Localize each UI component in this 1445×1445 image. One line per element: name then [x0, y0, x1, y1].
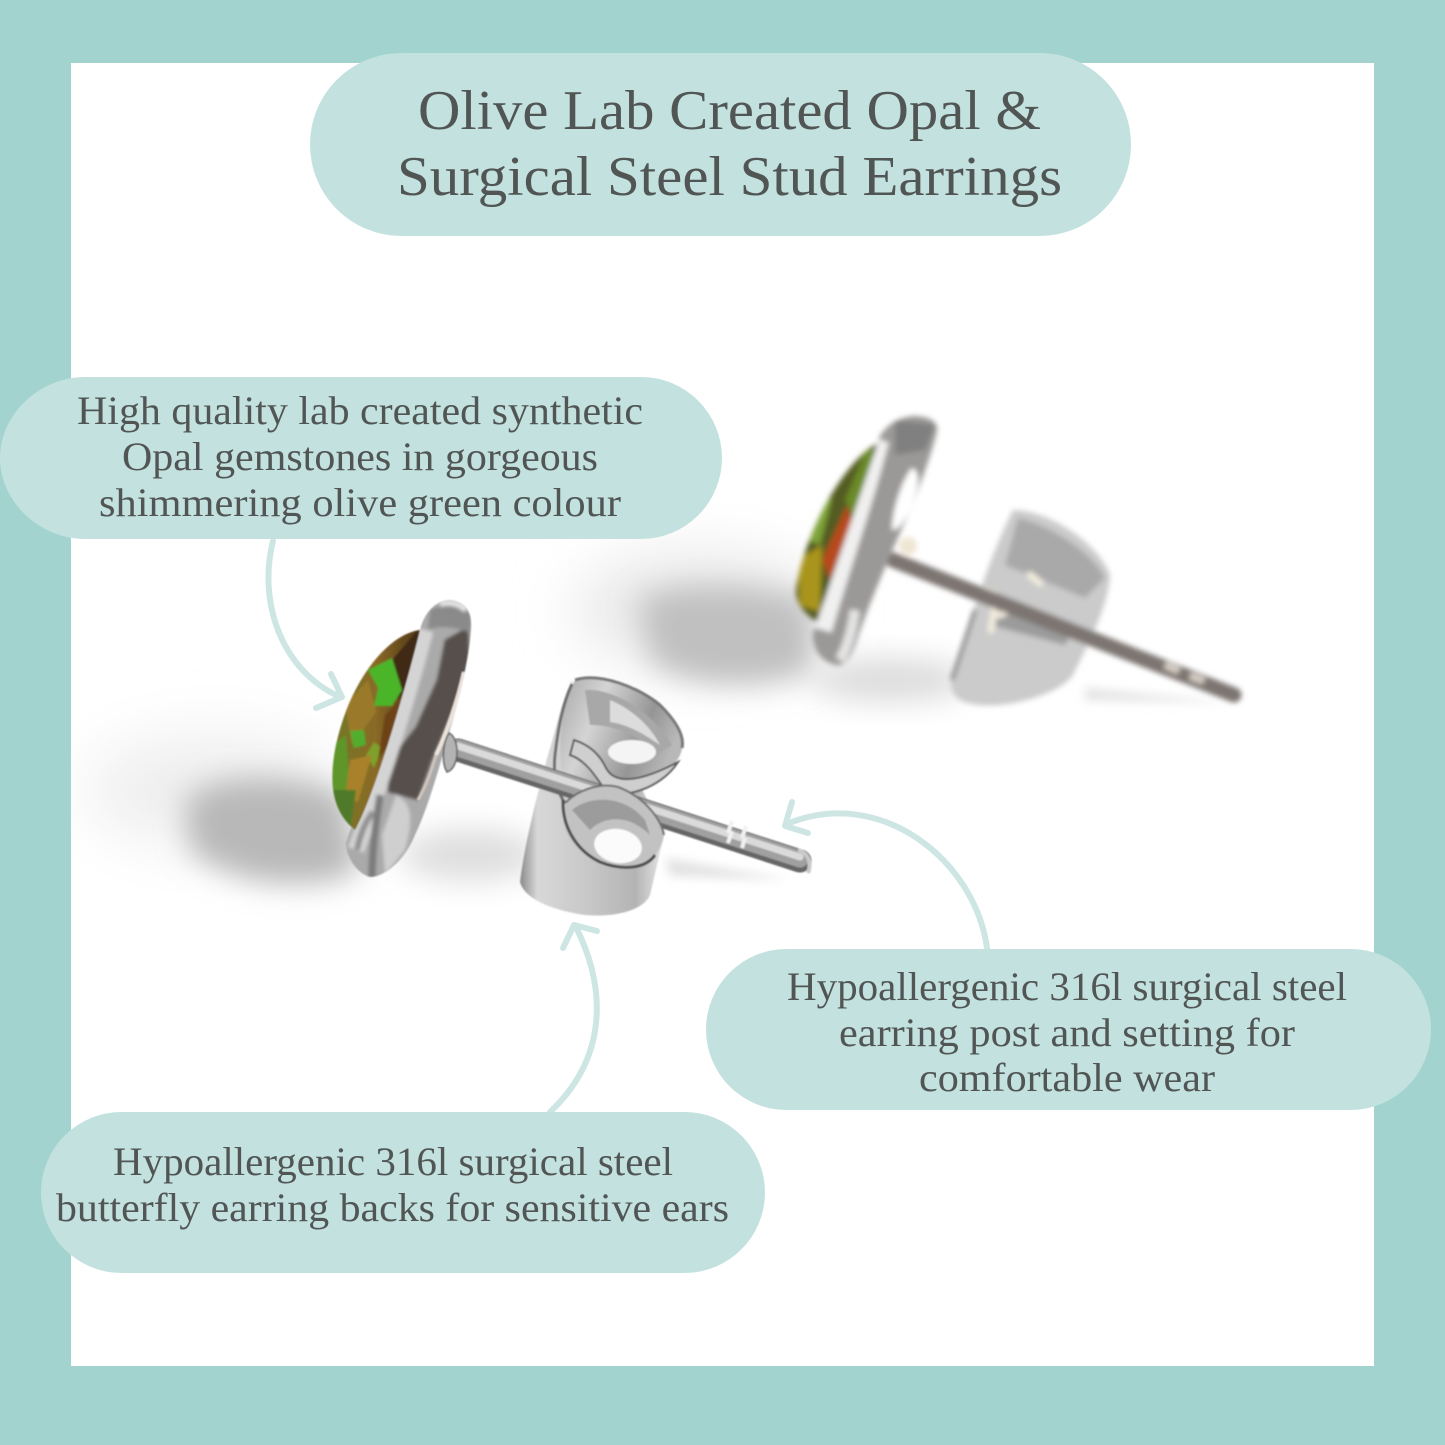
callout: butterfly backs: Hypoallergenic 316l surgical steel: [113, 1139, 673, 1184]
front earring back: upper wing: [554, 678, 683, 805]
front earring bezel: [346, 600, 472, 878]
front earring back: lower ring: [563, 785, 664, 867]
shadow: front earring: [85, 735, 790, 884]
rear earring bezel: [805, 410, 945, 670]
rear stone: [790, 440, 885, 630]
arrow: opal callout to stone: [268, 541, 342, 708]
shadow: rear earring: [575, 555, 1230, 703]
arrow: post callout to post: [785, 802, 987, 948]
front earring: [325, 595, 810, 916]
callout: opal gemstones: shimmering olive green colour: [99, 480, 621, 525]
callout: surgical steel post: comfortable wear: [919, 1055, 1215, 1100]
callout: opal gemstones: Opal gemstones in gorgeous: [122, 434, 598, 479]
front earring post collar: [443, 733, 457, 772]
title: Surgical Steel Stud Earrings: [397, 146, 1062, 208]
earring photo: [85, 410, 1234, 916]
callout: surgical steel post: [706, 949, 1431, 1110]
callout: opal gemstones: High quality lab created synthetic: [77, 388, 643, 433]
arrow: back callout to butterfly back: [550, 925, 597, 1112]
front earring post: [458, 746, 810, 873]
rear earring: [790, 410, 1234, 705]
rear earring back: [951, 510, 1110, 705]
rear earring post: [893, 560, 1234, 695]
callout: opal gemstones: [0, 377, 722, 539]
callout: surgical steel post: Hypoallergenic 316l surgical steel: [787, 964, 1347, 1009]
callout: butterfly backs: [41, 1112, 765, 1273]
title: Olive Lab Created Opal &: [418, 80, 1041, 142]
callout: surgical steel post: earring post and setting for: [839, 1010, 1295, 1055]
title: [310, 53, 1131, 236]
front earring back body: [520, 680, 664, 916]
front opal stone: [331, 629, 421, 830]
callout: butterfly backs: butterfly earring backs for sensitive ears: [56, 1185, 729, 1230]
